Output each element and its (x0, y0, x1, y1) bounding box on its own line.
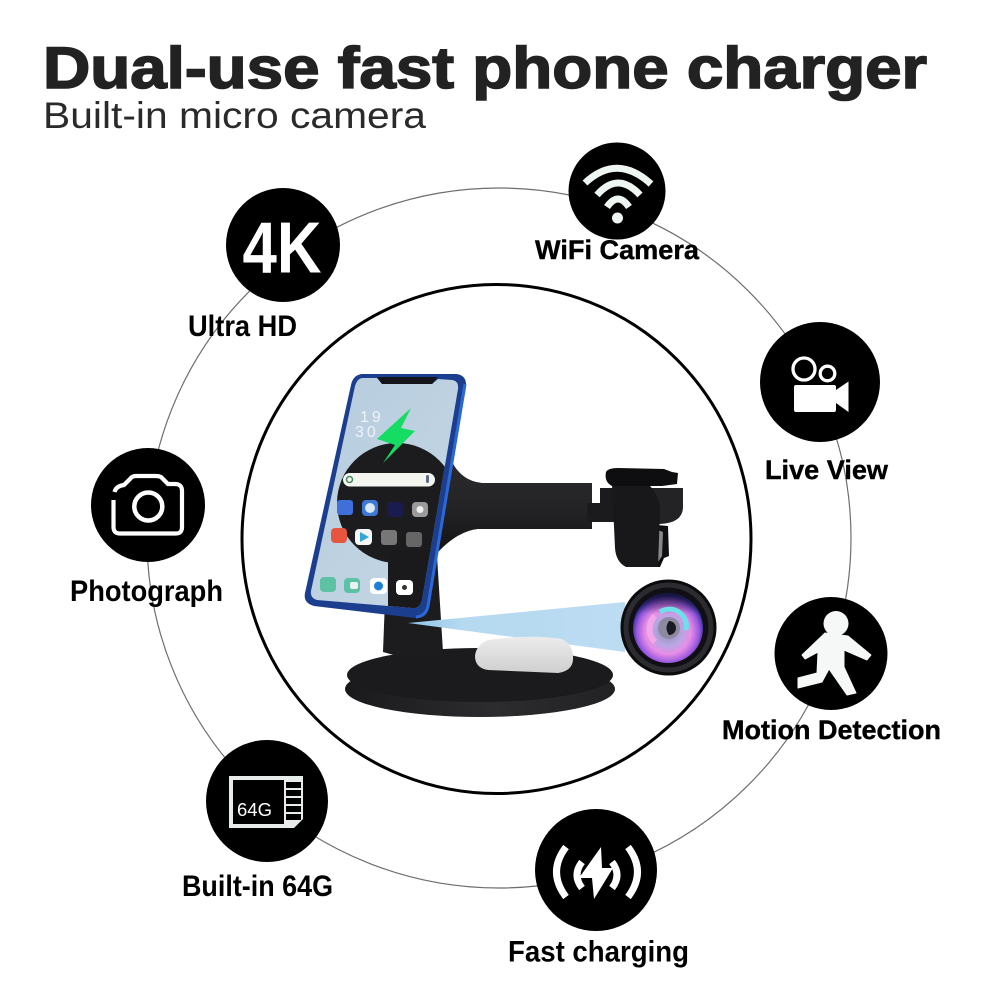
badge: Motion Detection: Motion Detection (722, 715, 941, 745)
clock: 19 (360, 409, 384, 426)
inner ring (242, 284, 751, 794)
phone right edge highlight (416, 384, 465, 617)
stand through screen (388, 550, 430, 608)
badge: Fast charging: Fast charging (508, 936, 689, 968)
product: charging stand (345, 462, 683, 717)
magnetic disc behind screen (337, 443, 445, 562)
app icons (320, 500, 428, 595)
badge: Motion Detection (722, 597, 941, 745)
badge: Built-in 64G: 64G (237, 799, 272, 820)
badge: 4K Ultra HD (188, 188, 340, 343)
clock (355, 409, 384, 441)
clock: 30 (355, 424, 379, 441)
badge: Built-in 64G (182, 740, 333, 903)
arm connector (587, 488, 614, 522)
base (345, 648, 615, 717)
earbud case (475, 637, 573, 673)
search bar (343, 473, 435, 486)
smart watch (606, 468, 678, 567)
badge: WiFi Camera (535, 142, 700, 265)
badge: 4K Ultra HD: Ultra HD (188, 310, 297, 343)
camera view beam (408, 602, 625, 652)
green charging bolt (377, 408, 415, 463)
badge: 4K Ultra HD: 4K (242, 208, 322, 288)
phone screen (310, 378, 458, 608)
notch (377, 377, 438, 384)
title: Dual-use fast phone charger (43, 36, 927, 101)
badge: Live View (760, 322, 889, 485)
subtitle: Built-in micro camera (43, 95, 426, 136)
badge: Built-in 64G: Built-in 64G (182, 870, 333, 903)
phone body (305, 374, 466, 618)
badge: Fast charging (508, 809, 689, 968)
camera lens (620, 580, 716, 676)
badge: Photograph (70, 448, 223, 608)
badge: Photograph: Photograph (70, 575, 223, 608)
column (383, 540, 443, 657)
arm (425, 462, 592, 552)
outer ring (147, 188, 851, 888)
phone (300, 370, 470, 620)
badge: WiFi Camera: WiFi Camera (535, 235, 700, 265)
badge: Live View: Live View (765, 455, 889, 485)
watch charger puck (650, 488, 683, 524)
